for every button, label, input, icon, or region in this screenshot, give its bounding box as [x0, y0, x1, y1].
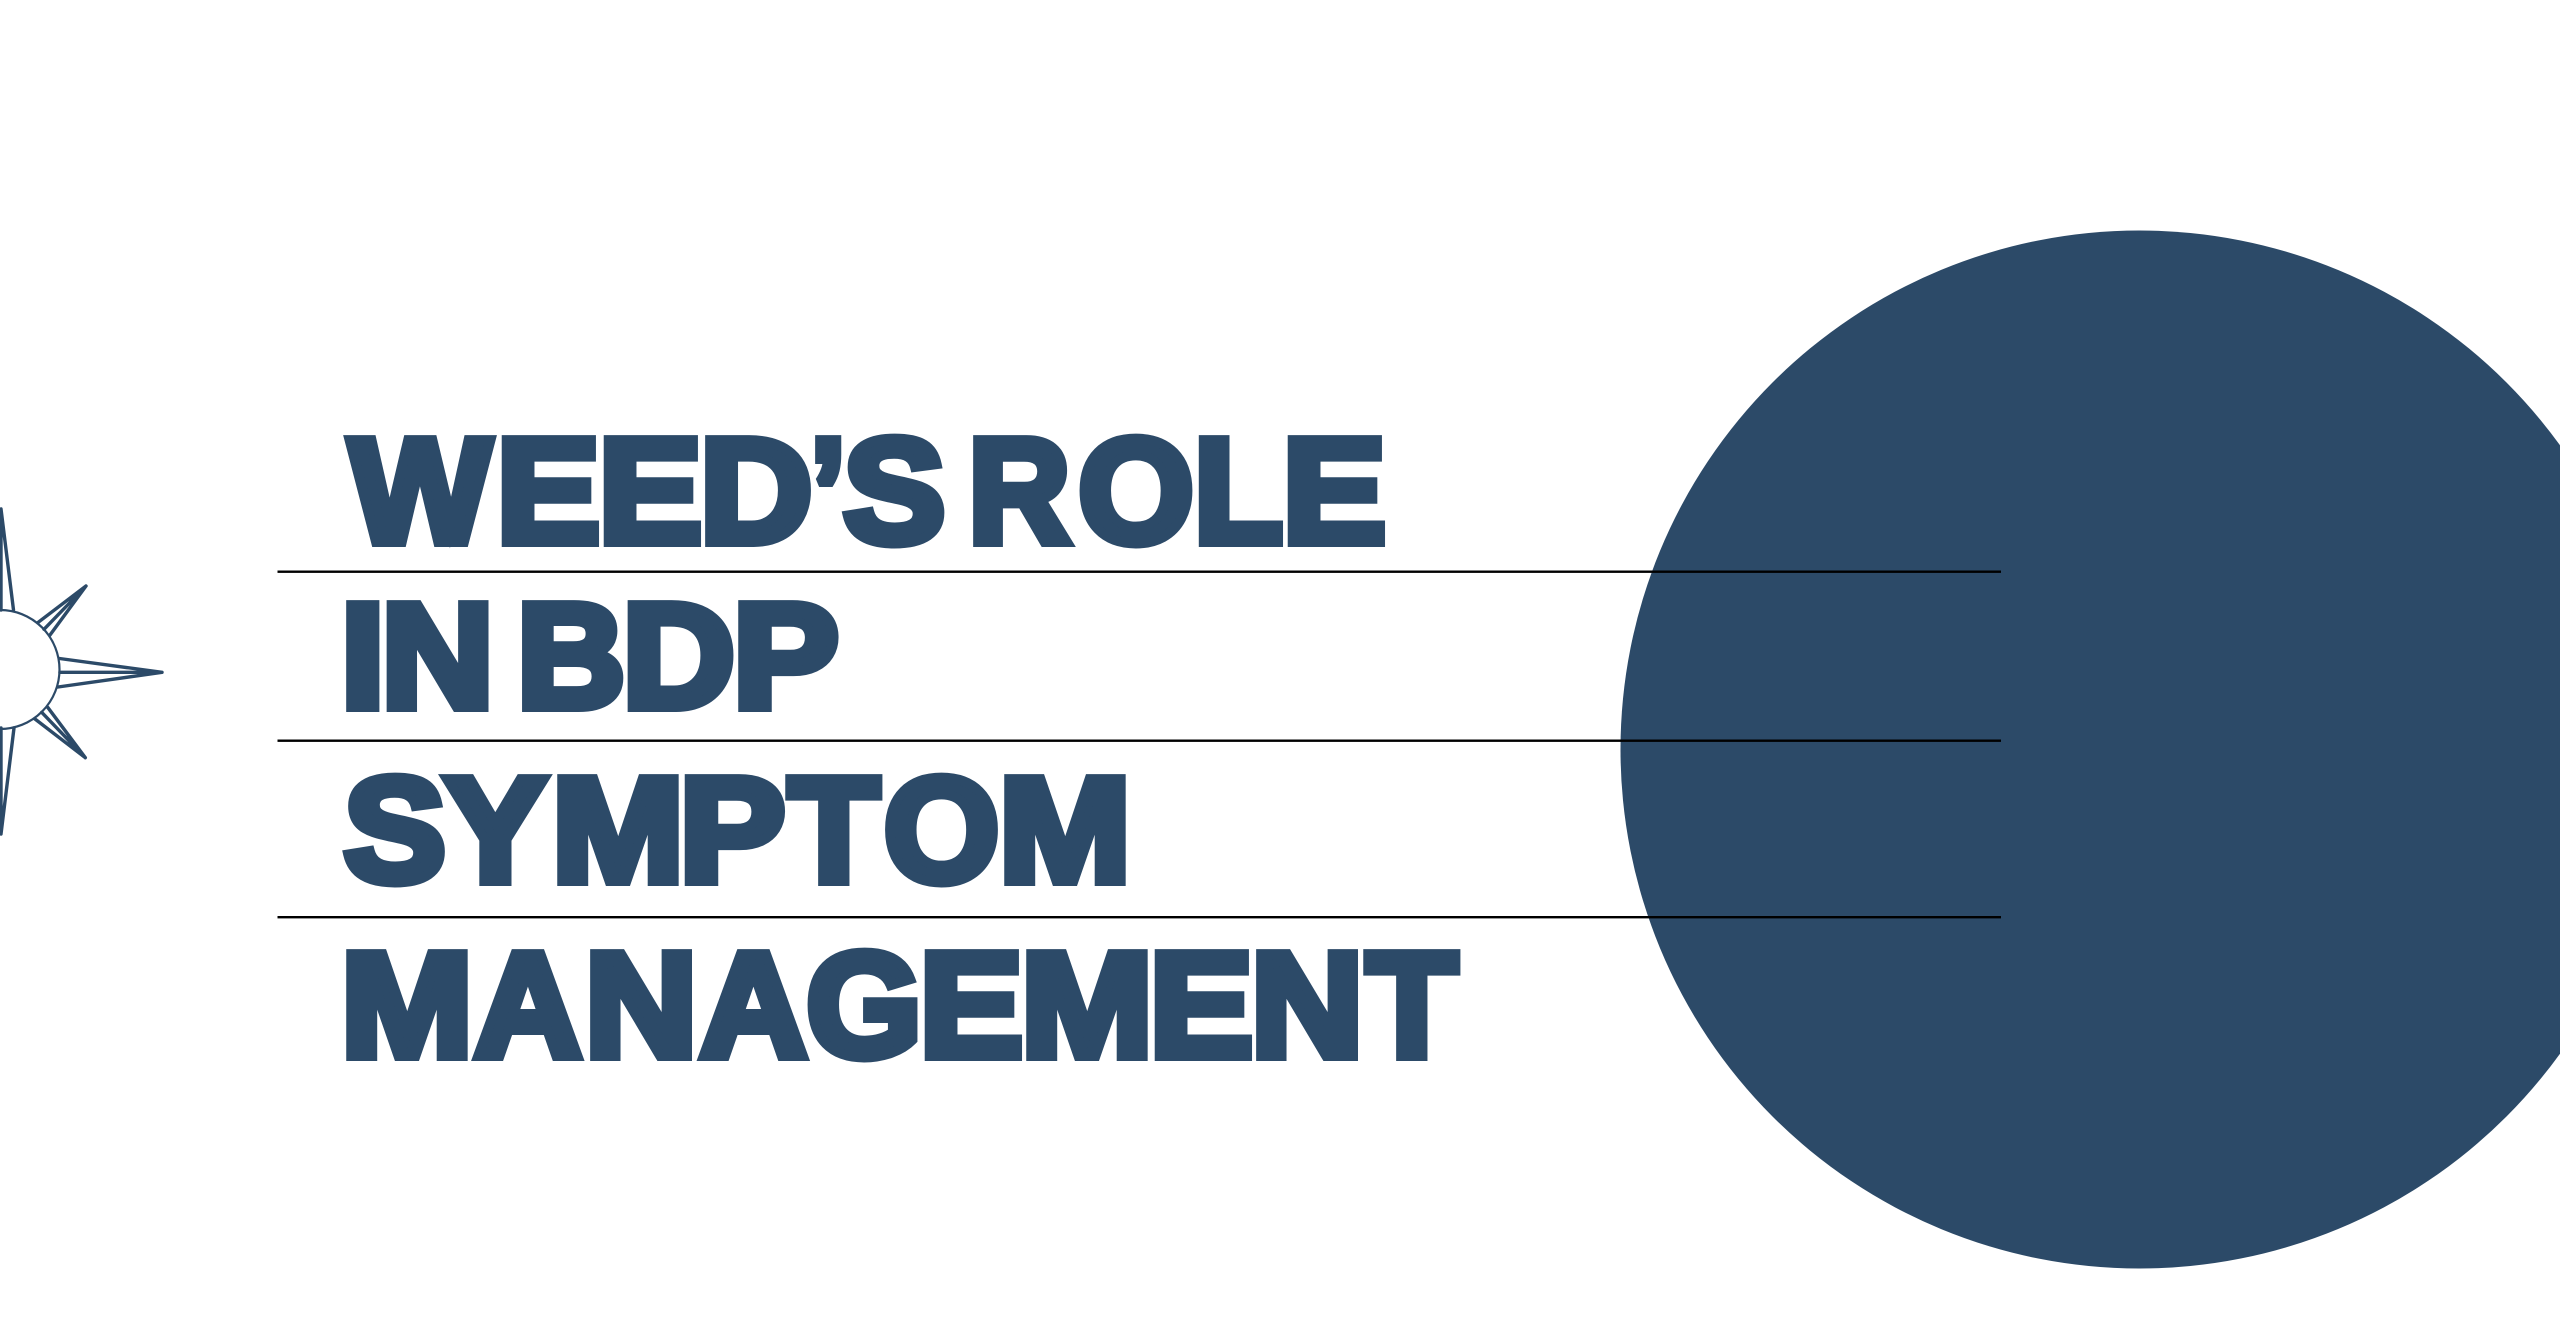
title: line 2: N: [382, 574, 494, 739]
title: line 2: P: [733, 574, 839, 739]
title: line 4: E: [1150, 923, 1253, 1088]
title: line 1: E: [497, 409, 600, 574]
title: line 3: Y: [444, 747, 546, 913]
title: line 1: [350, 408, 1386, 574]
divider rule 3: [278, 916, 2001, 918]
divider rule 2: [278, 740, 2001, 742]
title: line 1: S: [844, 408, 945, 574]
title: line 4: T: [1367, 923, 1457, 1088]
title: line 4: M: [1021, 923, 1153, 1088]
title: line 3: T: [789, 748, 879, 913]
title: line 1: R: [968, 408, 1070, 574]
title: line 4: A: [474, 923, 581, 1088]
title: line 4: A: [700, 923, 807, 1088]
title: line 2: B: [517, 573, 625, 739]
divider rule 1: [278, 570, 2001, 573]
icon: sun: [0, 509, 162, 834]
title: line 3: P: [680, 748, 785, 913]
decorative large circle: [1620, 230, 2560, 1268]
title: line 1: O: [1078, 409, 1194, 574]
title: line 1: ’: [811, 409, 846, 574]
title: line 4: G: [806, 923, 922, 1088]
title: line 2: D: [622, 574, 735, 739]
title: line 2: I: [341, 574, 385, 739]
title: line 3: O: [884, 748, 999, 913]
title: line 3: M: [999, 748, 1131, 913]
title: line 3: S: [344, 747, 446, 913]
title: line 3: [344, 747, 1131, 913]
title: line 1: W: [350, 408, 491, 574]
title: line 4: N: [585, 923, 697, 1088]
title: line 1: E: [599, 409, 702, 574]
title: line 1: L: [1194, 409, 1283, 574]
title: line 4: N: [1251, 923, 1363, 1088]
title: line 4: [341, 923, 1457, 1088]
title: line 3: M: [552, 748, 684, 913]
title: line 2: [341, 573, 839, 739]
title: line 4: E: [920, 923, 1023, 1088]
title: line 4: M: [341, 923, 473, 1088]
title: line 1: D: [700, 409, 812, 574]
title: line 1: E: [1283, 409, 1386, 574]
